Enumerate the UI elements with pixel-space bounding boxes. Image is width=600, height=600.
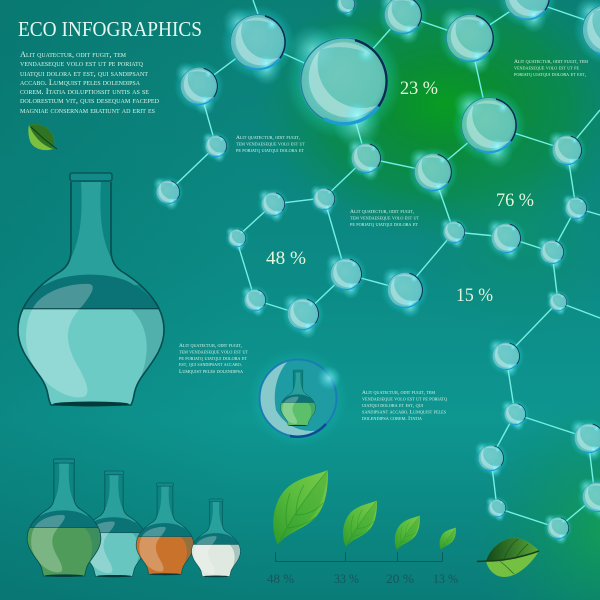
- note: top right: poriatq uiatqui dolora et est,: [514, 72, 586, 78]
- intro text block: dolorestium vit, quis desequam faceped: [20, 95, 160, 105]
- leaf bar chart: 20 %: [386, 571, 414, 586]
- intro text block: uiatqui dolora et est, qui sandipsant: [20, 68, 148, 78]
- intro text block: Alit quatectur, odit fugit, tem: [20, 49, 127, 59]
- intro text block: [20, 49, 160, 115]
- leaf bar chart: 13 %: [433, 571, 458, 586]
- molecule bubbles: [152, 0, 600, 545]
- percent: 76: 76 %: [496, 190, 534, 211]
- large flask: [11, 173, 171, 409]
- note: beside flask: Alit quatectur, odit fugit,: [179, 343, 242, 349]
- note: beside flask: Lumquist peles dolendipsa: [179, 369, 243, 375]
- intro text block: vendaeseque volo est ut pe poriatq: [20, 58, 144, 68]
- note: beside flask: [179, 343, 249, 375]
- note: top right: vendaeseque volo est ut pe: [514, 66, 580, 72]
- note: centre molecule: Alit quatectur, odit fugit,: [350, 209, 414, 215]
- percent: 48: 48 %: [266, 248, 306, 269]
- note: centre molecule: pe poriatq uiatqui dolora et: [350, 222, 419, 228]
- note: bubble: [362, 390, 447, 422]
- leaf bar chart: 48 %: [267, 571, 294, 586]
- note: beside flask: tem vendaeseque volo est ut: [179, 350, 249, 356]
- note: upper molecule: [236, 135, 306, 154]
- note: beside flask: pe poriatq uiatqui dolora et: [179, 356, 248, 362]
- intro text block: corem. Itatia doluptiossit untis as se: [20, 86, 149, 96]
- note: bubble: Alit quatectur, odit fugit, tem: [362, 390, 435, 396]
- note: bubble: uiatqui dolora et est, qui: [362, 403, 424, 409]
- intro text block: accabo. Lumquist peles dolendipsa: [20, 77, 141, 87]
- molecule bonds: [168, 0, 600, 528]
- leaf bar chart: 33 %: [334, 571, 359, 586]
- note: bubble: sandipsant accabo. Lumquist peles: [362, 410, 446, 416]
- note: top right: Alit quatectur, odit fugit, tem: [514, 59, 588, 65]
- note: beside flask: est, qui sandipsant accabo.: [179, 362, 242, 368]
- percent: 23: 23 %: [400, 78, 438, 99]
- icon: small leaf: [28, 124, 57, 150]
- note: centre molecule: [350, 209, 420, 228]
- flask row: [24, 459, 243, 578]
- intro text block: magniae consernam eratiunt ad erit es: [20, 105, 155, 115]
- note: centre molecule: tem vendaeseque volo est ut: [350, 216, 420, 222]
- icon: large leaf: [477, 538, 539, 577]
- percent: 15: 15 %: [456, 285, 493, 306]
- note: top right: [514, 59, 588, 78]
- title: ECO INFOGRAPHICS: [18, 17, 202, 41]
- leaf bar chart: [267, 470, 458, 586]
- icon: flask in bubble: [248, 348, 348, 448]
- note: upper molecule: tem vendaeseque volo est ut: [236, 142, 306, 148]
- note: upper molecule: pe poriatq uiatqui dolora et: [236, 148, 305, 154]
- note: upper molecule: Alit quatectur, odit fugit,: [236, 135, 300, 141]
- note: bubble: vendaeseque volo est ut pe poriatq: [362, 396, 447, 402]
- note: bubble: dolendipsa corem. Itatia: [362, 416, 422, 422]
